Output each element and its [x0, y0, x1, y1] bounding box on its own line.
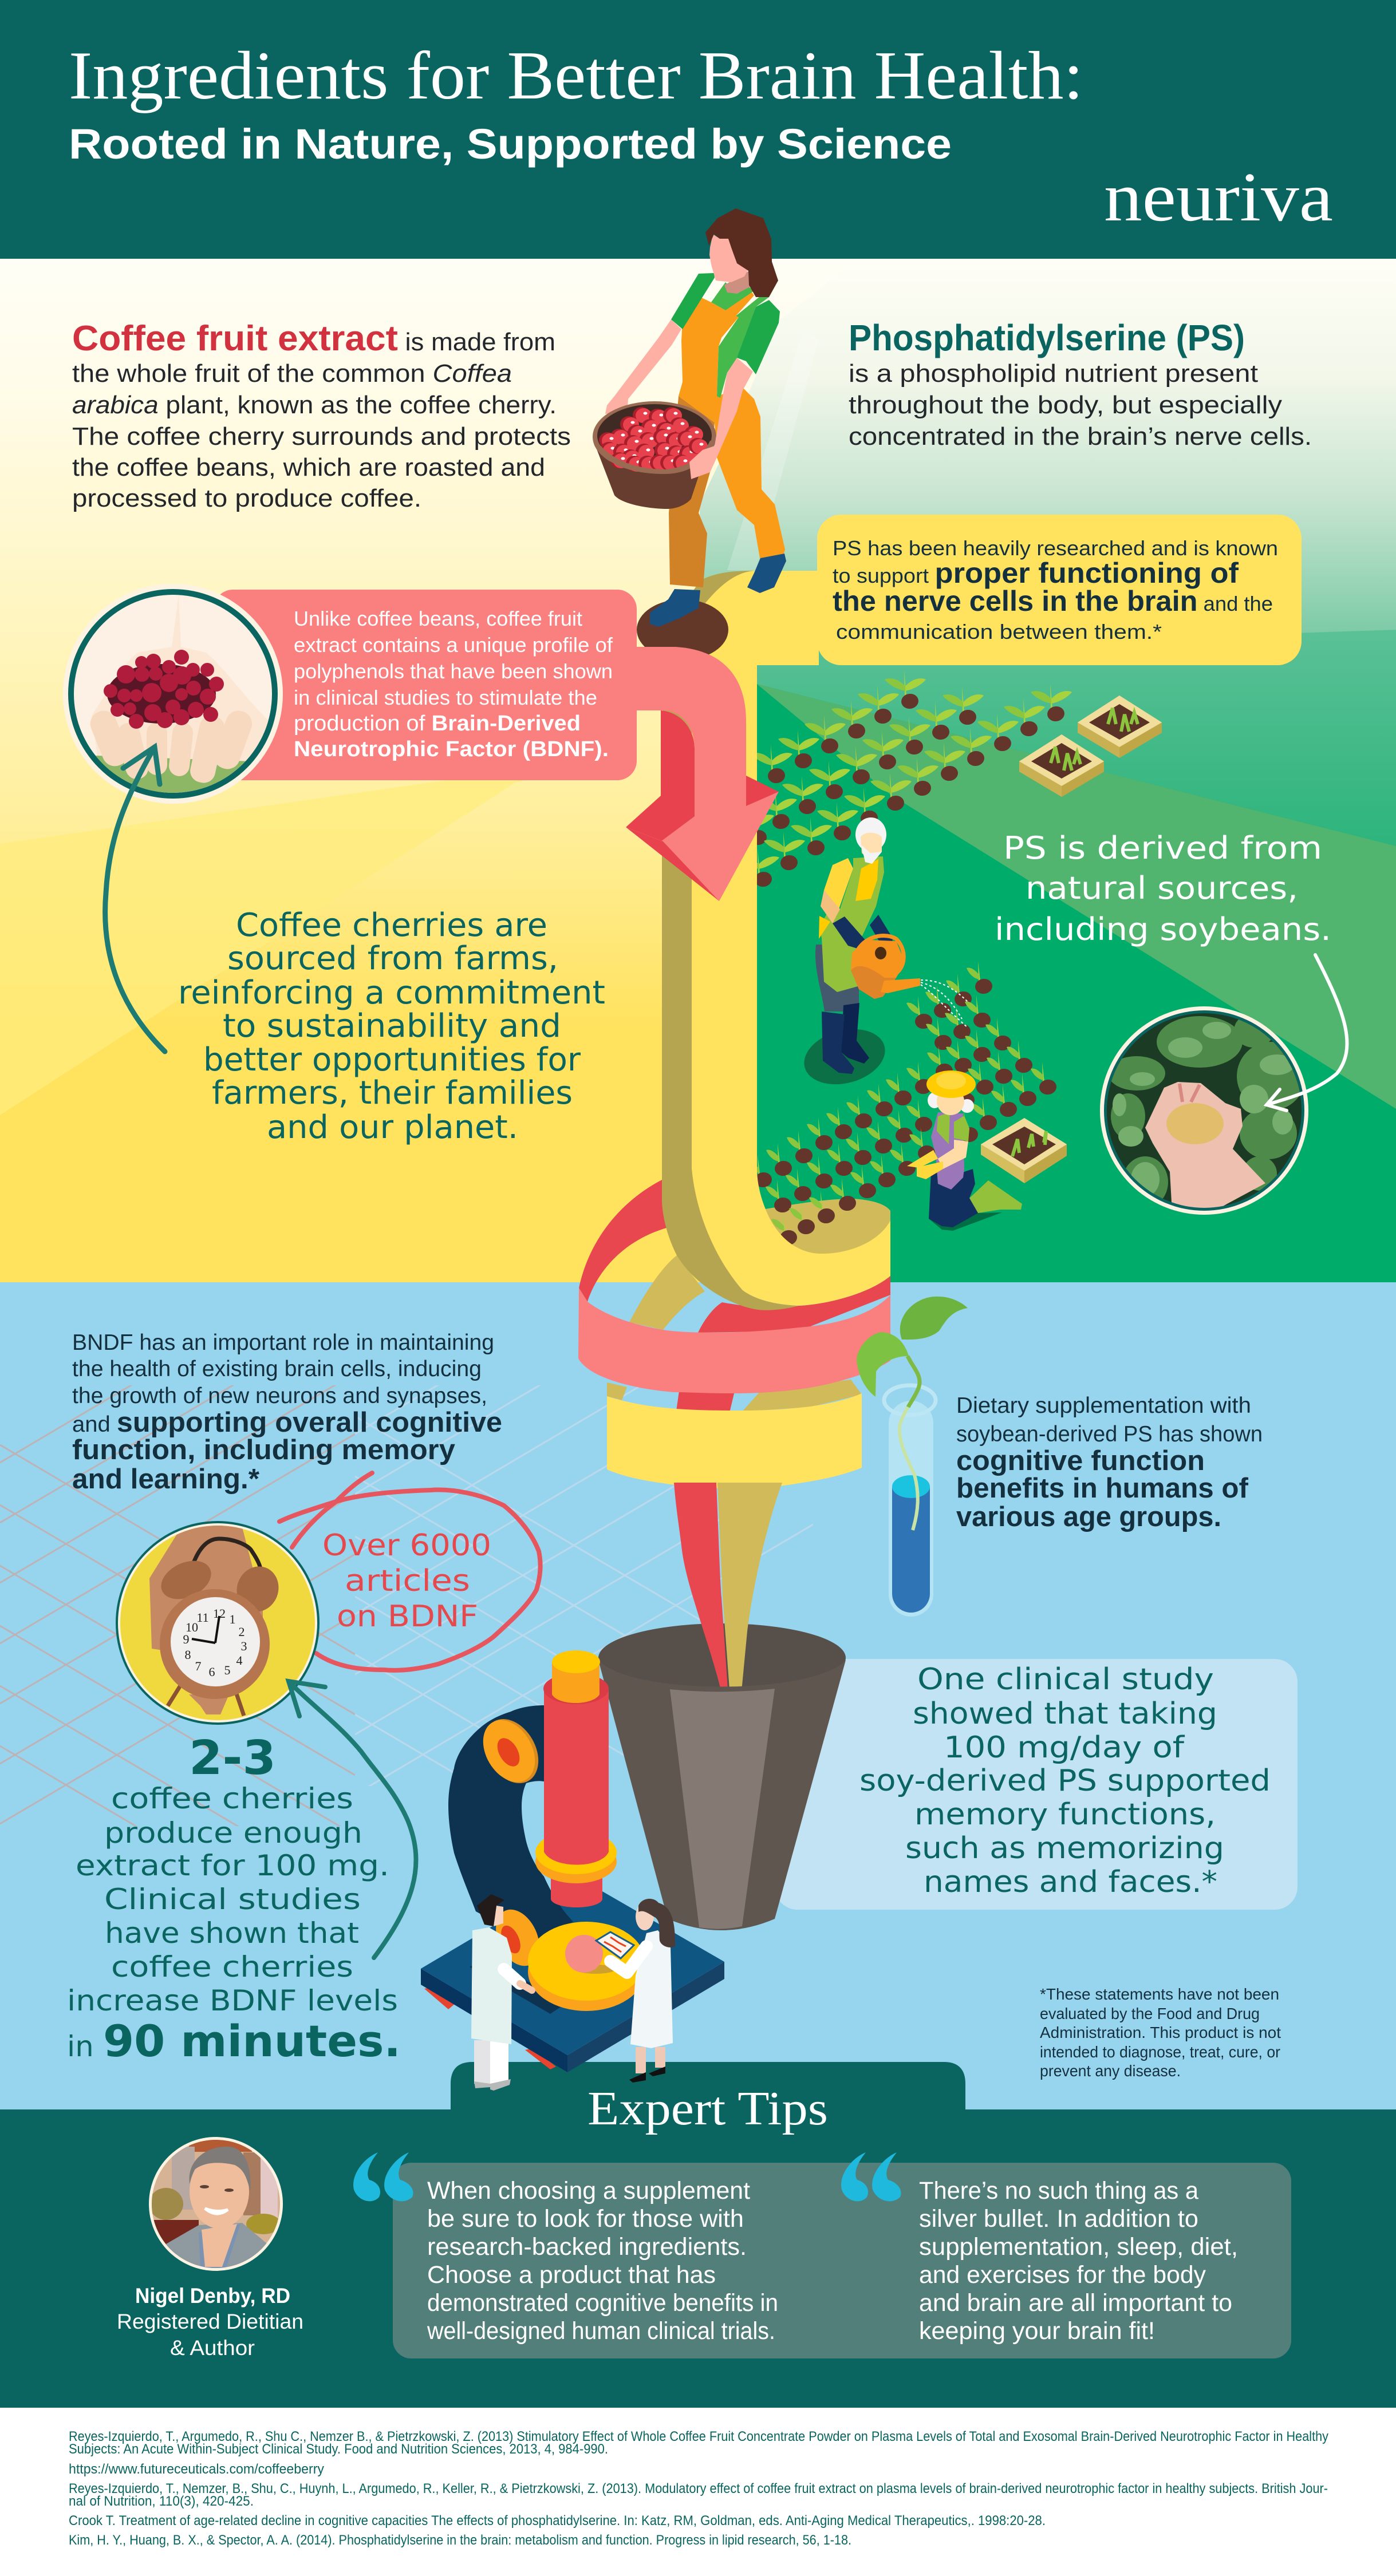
right arm: [689, 358, 753, 479]
panel: quotes: [353, 2152, 1291, 2358]
text: dietary supplementation: various age groups.: [956, 1502, 1221, 1532]
panel: polyphenols pink box: [214, 590, 637, 780]
photo: hand holding alarm clock: 9: [183, 1632, 189, 1646]
brown mound: [637, 599, 728, 660]
text: coffee fruit extract intro: [72, 319, 571, 512]
text: coffee cherries sourced from farms: Coffee cherries are: [236, 907, 547, 944]
text: BDNF role: function, including memory: [72, 1435, 455, 1465]
references: nal of Nutrition, 110(3), 420-425.: [69, 2494, 254, 2509]
funnel cup: [598, 1483, 846, 1930]
text: BDNF role: the health of existing brain cells, inducing: [72, 1357, 482, 1381]
ribbon knot: lower strips: [607, 1380, 862, 1413]
text: phosphatidylserine intro: Phosphatidylserine (PS): [849, 317, 1245, 358]
ribbon knot: back strips: [579, 1180, 890, 1333]
text: 2-3 coffee cherries: extract for 100 mg.: [76, 1849, 389, 1882]
icon: quote mark 1: [353, 2152, 413, 2201]
heading: expert tips: Expert Tips: [587, 2082, 828, 2135]
text: quote 2: There’s no such thing as a: [919, 2177, 1198, 2204]
text: quote 1: well-designed human clinical trials.: [427, 2317, 775, 2345]
text: 2-3 coffee cherries: 2-3: [189, 1731, 276, 1785]
text: quote 2: keeping your brain fit!: [919, 2317, 1155, 2345]
icon: quote mark 2: [841, 2152, 901, 2201]
photo: hand holding alarm clock: 11: [196, 1610, 209, 1625]
references: Subjects: An Acute Within-Subject Clinical Study. Food and Nutrition Sciences, 2013, 4, 984-990.: [69, 2441, 608, 2457]
text: dietary supplementation: benefits in humans of: [956, 1473, 1249, 1504]
arrow: text to soybean photo: [1267, 955, 1347, 1111]
ribbon: tan inner surface: [762, 1199, 890, 1257]
background: green field: [757, 630, 1396, 1282]
panel: polyphenols pink box: Neurotrophic Factor (BDNF).: [294, 737, 609, 761]
background: cream to yellow: [0, 259, 1396, 1282]
references: Kim, H. Y., Huang, B. X., & Spector, A. A. (2014). Phosphatidylserine in the brain: metabolism and function. Progress in lipid research, 56, 1-18.: [69, 2532, 851, 2548]
author name: Nigel Denby, RD: [135, 2284, 290, 2308]
text: PS is derived from natural sources: [995, 830, 1331, 947]
title: [69, 37, 1083, 168]
red scribble callout: over 6000 articles: [279, 1473, 541, 1670]
arrow: text to clock: [289, 1681, 416, 1958]
text: coffee fruit extract intro: The coffee cherry surrounds and protects: [72, 422, 571, 451]
pink arrow ribbon: [626, 647, 779, 901]
overalls: [679, 288, 785, 558]
disclaimer: *These statements have not been: [1040, 1985, 1279, 2003]
text: dietary supplementation: [956, 1393, 1263, 1532]
test tube with sprout: [857, 1297, 968, 1617]
text: coffee fruit extract intro: arabica plant, known as the coffee cherry.: [72, 391, 557, 419]
panel: polyphenols pink box: Unlike coffee beans, coffee fruit: [294, 607, 582, 630]
text: coffee fruit extract intro: the coffee beans, which are roasted and: [72, 453, 545, 481]
text: coffee fruit extract intro: the whole fruit of the common Coffea: [72, 359, 512, 388]
panel: PS yellow box: [817, 515, 1302, 665]
woman harvesting coffee: [593, 208, 786, 627]
panel: clinical study light blue box: such as memorizing: [905, 1831, 1224, 1866]
author name: & Author: [170, 2336, 255, 2360]
text: 2-3 coffee cherries: in 90 minutes.: [67, 2016, 401, 2067]
text: PS is derived from natural sources: including soybeans.: [995, 911, 1331, 947]
panel: PS yellow box: PS has been heavily researched and is known: [833, 536, 1278, 560]
microscope stage: [528, 1922, 645, 2011]
text: quote 2: and exercises for the body: [919, 2261, 1206, 2289]
microscope lens: [487, 1903, 548, 1973]
microscope tube: [535, 1650, 617, 1907]
title: Rooted in Nature, Supported by Science: [69, 120, 952, 168]
text: coffee cherries sourced from farms: to sustainability and: [223, 1008, 561, 1045]
grid lines, pale: [355, 1385, 813, 1786]
panel: clinical study light blue box: One clinical study: [917, 1662, 1214, 1697]
text: coffee cherries sourced from farms: better opportunities for: [203, 1041, 581, 1078]
expert tips band: [0, 2062, 1396, 2408]
text: 2-3 coffee cherries: have shown that: [105, 1917, 359, 1950]
text: 2-3 coffee cherries: Clinical studies: [104, 1883, 361, 1916]
arrow: farm to coffee photo: [105, 747, 165, 1052]
text: 2-3 coffee cherries: coffee cherries: [111, 1950, 353, 1984]
red scribble callout: over 6000 articles: on BDNF: [337, 1599, 478, 1634]
grid lines, grey: [0, 1385, 355, 1826]
author name: Registered Dietitian: [117, 2310, 303, 2333]
photo: hand holding alarm clock: 4: [236, 1653, 243, 1668]
text: coffee cherries sourced from farms: and our planet.: [267, 1109, 518, 1146]
kneeling worker with helmet: [907, 1070, 1022, 1231]
text: 2-3 coffee cherries: coffee cherries: [111, 1782, 353, 1815]
logo: neuriva: neuriva: [1104, 159, 1333, 236]
text: phosphatidylserine intro: [849, 317, 1312, 451]
shirt: [671, 273, 780, 398]
panel: clinical study light blue box: 100 mg/day of: [944, 1730, 1185, 1765]
scientist right: [610, 1899, 675, 2083]
photo: hand holding alarm clock: 6: [208, 1665, 215, 1679]
panel: polyphenols pink box: in clinical studies to stimulate the: [294, 686, 597, 709]
photo: hand holding alarm clock: 3: [240, 1639, 247, 1653]
seed crate 1: [1078, 696, 1162, 758]
scientist left: [471, 1894, 532, 2091]
text: BDNF role: BNDF has an important role in maintaining: [72, 1330, 494, 1355]
background: mint upper right: [699, 259, 1396, 653]
text: quote 1: demonstrated cognitive benefits in: [427, 2289, 778, 2317]
text: quote 1: [427, 2177, 778, 2345]
photo: hand holding alarm clock: 5: [224, 1663, 230, 1677]
references: [0, 2408, 1396, 2576]
microscope base: [421, 1876, 724, 2072]
panel: polyphenols pink box: extract contains a unique profile of: [294, 633, 613, 657]
disclaimer: evaluated by the Food and Drug: [1040, 2005, 1260, 2022]
face: [709, 234, 748, 282]
text: phosphatidylserine intro: concentrated in the brain’s nerve cells.: [849, 422, 1312, 451]
panel: clinical study light blue box: soy-derived PS supported: [859, 1764, 1271, 1798]
photo: hand holding alarm clock: [116, 1521, 320, 1725]
background: blue lower section: [0, 1282, 1396, 2110]
panel: clinical study light blue box: showed that taking: [913, 1697, 1217, 1731]
references: https://www.futureceuticals.com/coffeeberry: [69, 2462, 324, 2477]
red scribble callout: over 6000 articles: articles: [345, 1564, 470, 1598]
disclaimer: [1040, 1985, 1281, 2080]
panel: clinical study light blue box: names and faces.*: [924, 1865, 1217, 1899]
text: coffee cherries sourced from farms: reinforcing a commitment: [178, 974, 605, 1012]
yellow ribbon: [662, 571, 890, 1310]
disclaimer: intended to diagnose, treat, cure, or: [1040, 2043, 1280, 2061]
text: quote 2: [919, 2177, 1238, 2345]
panel: polyphenols pink box: polyphenols that have been shown: [294, 659, 613, 683]
photo: hand holding alarm clock: 10: [186, 1620, 198, 1634]
panel: PS yellow box: to support proper functioning of: [833, 557, 1239, 589]
microscope eyepiece: [472, 1709, 549, 1793]
photo: hand holding alarm clock: 7: [195, 1659, 202, 1673]
elderly farmer with watering can: [798, 817, 968, 1093]
seed crate 3: [981, 1118, 1067, 1183]
text: BDNF role: and supporting overall cognitive: [72, 1407, 502, 1438]
text: phosphatidylserine intro: throughout the body, but especially: [849, 391, 1282, 419]
ribbon knot: yellow band: [607, 1393, 862, 1488]
panel: polyphenols pink box: production of Brain-Derived: [294, 712, 581, 736]
panel: clinical study light blue box: [775, 1659, 1298, 1910]
photo: hands holding soybeans: [1100, 1006, 1308, 1215]
text: phosphatidylserine intro: is a phospholipid nutrient present: [849, 359, 1258, 388]
text: coffee cherries sourced from farms: sourced from farms,: [227, 940, 558, 977]
shoes: [650, 554, 786, 627]
left arm: [605, 319, 681, 414]
text: quote 1: be sure to look for those with: [427, 2205, 744, 2233]
disclaimer: Administration. This product is not: [1040, 2024, 1281, 2041]
photo: hand holding alarm clock: 2: [238, 1625, 245, 1639]
text: quote 2: silver bullet. In addition to: [919, 2205, 1198, 2233]
text: BDNF role: the growth of new neurons and synapses,: [72, 1384, 487, 1408]
text: quote 1: Choose a product that has: [427, 2261, 716, 2289]
panel: PS yellow box: the nerve cells in the brain and the: [833, 585, 1273, 617]
hair: [705, 208, 778, 297]
text: quote 2: supplementation, sleep, diet,: [919, 2233, 1238, 2261]
disclaimer: prevent any disease.: [1040, 2062, 1181, 2080]
text: quote 1: When choosing a supplement: [427, 2177, 750, 2204]
text: PS is derived from natural sources: PS is derived from: [1003, 830, 1322, 866]
photo: hand holding alarm clock: 8: [184, 1647, 191, 1662]
panel: clinical study light blue box: memory functions,: [914, 1797, 1216, 1832]
text: dietary supplementation: soybean-derived PS has shown: [956, 1422, 1263, 1447]
text: quote 2: and brain are all important to: [919, 2289, 1232, 2317]
microscope: [421, 1650, 724, 2072]
photo: hands holding coffee cherries: [63, 584, 283, 804]
text: coffee fruit extract intro: Coffee fruit extract is made from: [72, 319, 555, 358]
text: coffee cherries sourced from farms: farmers, their families: [212, 1074, 573, 1112]
background: light rays in yellow: [0, 755, 623, 1115]
microscope arm: [448, 1705, 573, 1943]
photo: hand holding alarm clock: 12: [213, 1606, 226, 1621]
title: Ingredients for Better Brain Health:: [69, 37, 1083, 113]
neck: [724, 271, 750, 294]
author name: [117, 2284, 303, 2360]
panel: PS yellow box: communication between them.*: [836, 620, 1162, 643]
text: dietary supplementation: cognitive function: [956, 1445, 1205, 1476]
text: 2-3 coffee cherries: [67, 1731, 401, 2067]
text: dietary supplementation: Dietary supplementation with: [956, 1393, 1251, 1418]
text: BDNF role: [72, 1330, 502, 1495]
text: quote 1: research-backed ingredients.: [427, 2233, 747, 2261]
text: PS is derived from natural sources: natural sources,: [1026, 870, 1298, 906]
references: Crook T. Treatment of age-related decline in cognitive capacities The effects of phosphatidylserine. In: Katz, RM, Goldman, eds. Anti-Aging Medical Therapeutics,. 1998:20-28.: [69, 2513, 1046, 2528]
photo: hand holding alarm clock: 1: [229, 1612, 236, 1626]
red scribble callout: over 6000 articles: Over 6000: [322, 1528, 491, 1563]
text: coffee cherries sourced from farms: [178, 907, 605, 1146]
text: BDNF role: and learning.*: [72, 1464, 260, 1495]
basket: [593, 401, 716, 509]
text: 2-3 coffee cherries: produce enough: [104, 1816, 362, 1850]
lower soybean rows: [746, 961, 1058, 1246]
background: pale ray: [727, 335, 819, 571]
soybean field: [733, 670, 1072, 1246]
ribbon knot: pink band: [578, 1288, 890, 1393]
left leg: [669, 396, 715, 587]
text: 2-3 coffee cherries: increase BDNF levels: [67, 1984, 398, 2017]
seed crate 2: [1019, 734, 1104, 797]
header band: [0, 0, 1396, 259]
text: coffee fruit extract intro: processed to produce coffee.: [72, 484, 421, 512]
upper soybean rows: [733, 670, 1072, 888]
portrait: Nigel Denby: [149, 2137, 283, 2273]
